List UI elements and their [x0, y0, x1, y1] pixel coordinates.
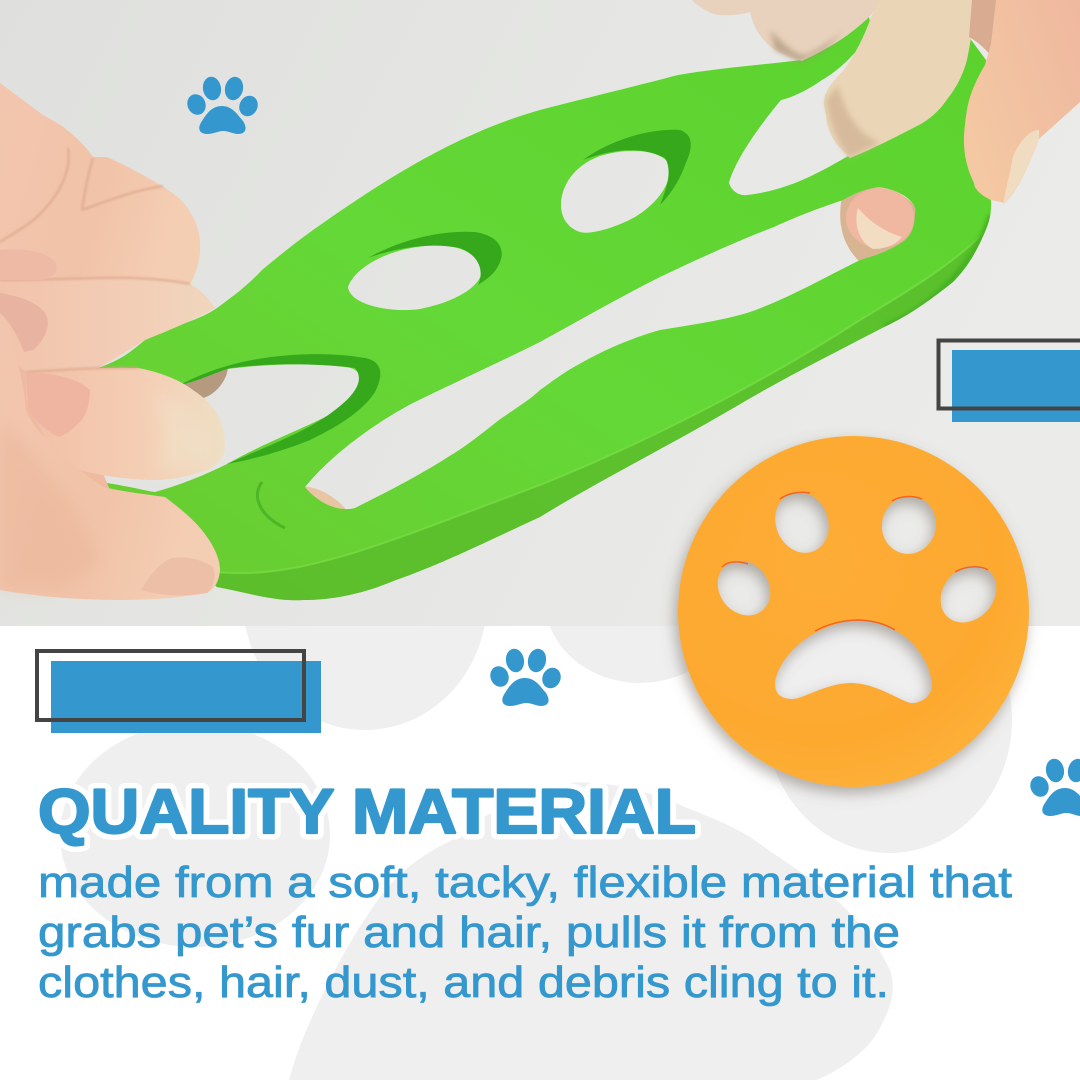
- finger B: [0, 278, 215, 372]
- thumb and palm: [0, 350, 220, 600]
- big finger: [824, 0, 973, 158]
- hole rims: [722, 492, 988, 631]
- fingers behind the silicone: [178, 188, 917, 516]
- orange paw disc: [678, 436, 1029, 787]
- body text: clothes, hair, dust, and debris cling to it.: [38, 958, 889, 1007]
- paw icon: top left: [184, 75, 261, 134]
- back strip: [969, 0, 996, 53]
- body text: grabs pet’s fur and hair, pulls it from the: [38, 908, 900, 957]
- deco frame: left: [37, 651, 321, 733]
- back knuckle finger: [0, 83, 200, 284]
- creases: [0, 148, 190, 372]
- nails: [0, 249, 57, 280]
- heading: QUALITY MATERIAL: [38, 777, 696, 847]
- photo: stretched green silicone and hands: [0, 0, 1080, 640]
- paw icon: middle: [487, 647, 564, 706]
- paw icon: right edge: [1027, 757, 1080, 816]
- right hand: [692, 0, 1080, 205]
- deco frame: right: [938, 340, 1080, 422]
- photo background: [0, 0, 1080, 626]
- crease at lower left: [257, 482, 285, 528]
- left hand: [0, 83, 225, 600]
- nail: [1003, 130, 1039, 205]
- tip highlights: [173, 419, 180, 450]
- palm shading: [4, 444, 83, 594]
- body text: made from a soft, tacky, flexible material that: [38, 858, 1012, 907]
- heading: QUALITY MATERIAL: [38, 777, 696, 847]
- shading: hole edges: [583, 130, 691, 205]
- body text: [38, 858, 1012, 1007]
- finger C: [26, 368, 225, 480]
- hand base behind the fingers: [18, 366, 110, 488]
- top finger: [692, 0, 884, 61]
- thumb: [964, 0, 1080, 203]
- shading: lower band: [215, 214, 990, 600]
- green silicone shape: [93, 17, 1000, 640]
